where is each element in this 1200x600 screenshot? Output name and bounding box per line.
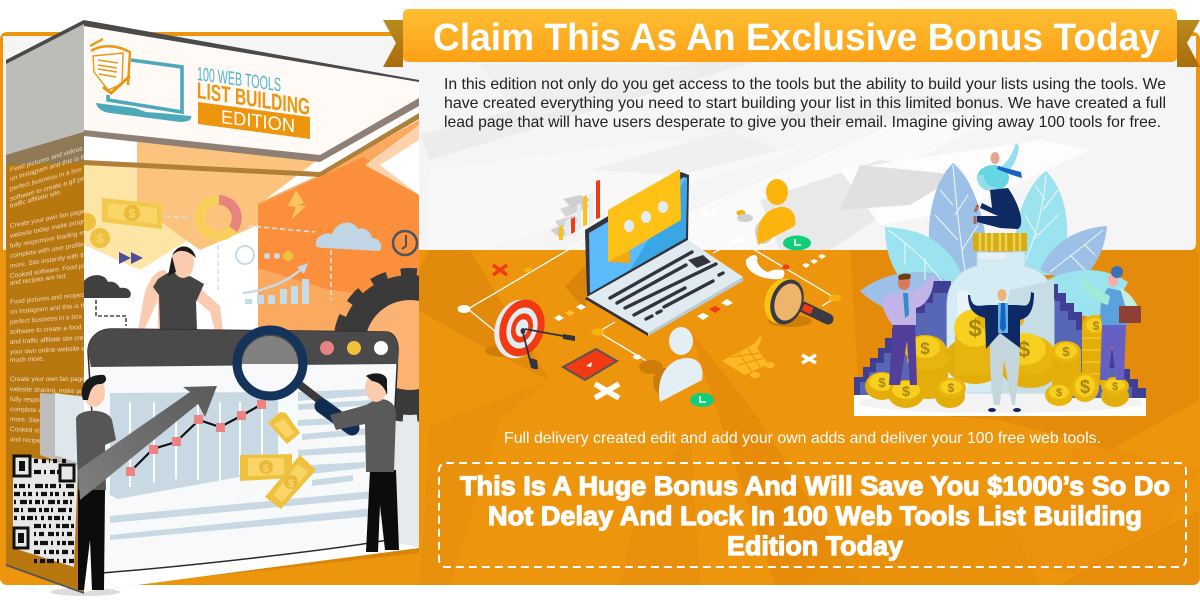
callout: dashed bonus box: Edition Today [727, 531, 903, 561]
side panel text: traffic affiliate site. [10, 189, 62, 210]
text block: intro paragraph [444, 76, 1166, 131]
leaves [860, 163, 1128, 318]
side panel text: fully responsive loading modern [10, 227, 102, 250]
side panel text: fully responsive and loading [10, 396, 91, 405]
front art: money, donut, cloud icons: $ [128, 206, 136, 221]
banknotes: $ [263, 463, 269, 475]
coins in jar: $ [968, 315, 982, 342]
staircases [854, 281, 951, 395]
product box [6, 20, 419, 596]
coin stacks [865, 315, 1129, 408]
side panel text [9, 142, 103, 446]
side panel text: Food pictures and recipes are [10, 290, 96, 306]
side panel text: Create your own fan page [10, 376, 85, 383]
text block: intro paragraph: have created everything you need to start building your list in this limited bonus. We have created a full [444, 95, 1166, 112]
callout: dashed bonus box [439, 463, 1186, 567]
banknotes [240, 412, 316, 509]
box shadow [50, 548, 419, 596]
side panel text: complete with user [10, 406, 65, 415]
side panel text: and recipes are hot. [10, 273, 68, 287]
text block: intro paragraph: In this edition not only do you get access to the tools but the ability to build your lists using the tools. We [444, 76, 1166, 93]
browser window [88, 329, 398, 573]
man on left [76, 375, 116, 590]
coin stacks: $ [1056, 387, 1062, 399]
woman behind window [138, 246, 223, 330]
jar [947, 233, 1054, 393]
icon: speech bubble [608, 169, 681, 263]
figure: right woman [1080, 266, 1141, 380]
coin stacks: $ [1062, 344, 1070, 359]
illustration: laptop network [458, 169, 841, 407]
box front [84, 20, 419, 592]
front art: colour panels [84, 20, 419, 548]
side panel text: software to create a food [10, 324, 82, 336]
trend arrow [78, 386, 217, 500]
coin stacks: $ [920, 339, 930, 358]
illustration: money jar team [854, 143, 1146, 416]
side panel text: perfect business in a box [10, 166, 82, 193]
side panel text: complete with user profiles and [10, 239, 100, 260]
figure: jumping man [975, 143, 1022, 229]
side panel text: more. Site instantly [10, 416, 66, 426]
chart line [126, 400, 266, 476]
coins in jar [944, 308, 1059, 388]
white floor [854, 395, 1146, 416]
logo: EDITION [221, 107, 295, 137]
magnifying glass [237, 330, 352, 428]
side panel text: on Instagram and this is the [10, 152, 90, 183]
logo: LIST BUILDING [197, 77, 310, 120]
gear [334, 268, 419, 422]
front art: money, donut, cloud icons: $ [96, 231, 104, 246]
coin stacks: $ [1093, 319, 1100, 333]
icon: laptop [565, 172, 743, 336]
coins in jar: $ [1018, 337, 1030, 362]
icon: magnifier [759, 274, 828, 329]
side panel text: much more. [10, 356, 44, 364]
figure: left man [882, 274, 934, 385]
side panel text: Cooked software [10, 426, 59, 435]
box left side [6, 20, 103, 594]
icon: bar chart [550, 180, 600, 240]
coin stacks: $ [1080, 377, 1090, 397]
panel: light upper area [3, 36, 1196, 250]
icon: phone [746, 255, 784, 279]
ribbon: heading banner [383, 9, 1200, 67]
callout: dashed bonus box: Not Delay And Lock In 100 Web Tools List Building [488, 501, 1142, 531]
icon: target with arrows [485, 293, 575, 369]
icon: orange user [737, 179, 811, 250]
title: Claim This As An Exclusive Bonus Today [433, 17, 1160, 59]
text block: delivery note: Full delivery created edit and add your own adds and deliver your 100 free web tools. [504, 430, 1101, 447]
front art: money, donut, cloud icons [78, 190, 417, 326]
side panel text: and recipes are hot. [10, 436, 68, 446]
side panel text: Create your own fan page [10, 208, 85, 230]
text block: intro paragraph: lead page that will have users desperate to give you their email. Imagine giving away 100 tools for free. [444, 114, 1161, 131]
logo [90, 39, 310, 139]
icon: video card [563, 349, 617, 380]
side panel text: website today make progress [9, 216, 95, 240]
coin stacks: $ [902, 383, 910, 399]
logo: 100 WEB TOOLS [197, 64, 281, 96]
side panel text: your own online website so [10, 345, 88, 356]
screenshot thumbnail [40, 393, 84, 470]
qr code [13, 455, 78, 567]
coin stacks: $ [1112, 381, 1118, 393]
network nodes [458, 210, 841, 360]
callout: dashed bonus box: This Is A Huge Bonus And Will Save You $1000’s So Do [460, 471, 1170, 501]
figure: centre man [968, 289, 1034, 412]
icon: shopping cart [722, 336, 775, 378]
side panel text: software to create a gif powered [10, 170, 103, 203]
coin stacks: $ [948, 381, 955, 395]
side panel text: Feed pictures and videos can [10, 142, 95, 174]
network lines [468, 213, 835, 372]
coin stacks: $ [878, 375, 886, 390]
side panel text: website sharing, make progress [9, 386, 102, 396]
side panel text: perfect business in a box [10, 313, 83, 326]
side panel text: Cooked software. Food pictures [10, 260, 102, 280]
man on right [330, 373, 399, 552]
side panel text: on Instagram and this is the [10, 302, 90, 316]
markers: crosses and diamonds [493, 209, 826, 398]
banknotes: $ [288, 478, 294, 490]
side panel text: and traffic affiliate site create [10, 334, 93, 346]
side panel text: more. Site instantly with the [10, 251, 90, 270]
icon: white user [639, 327, 714, 407]
